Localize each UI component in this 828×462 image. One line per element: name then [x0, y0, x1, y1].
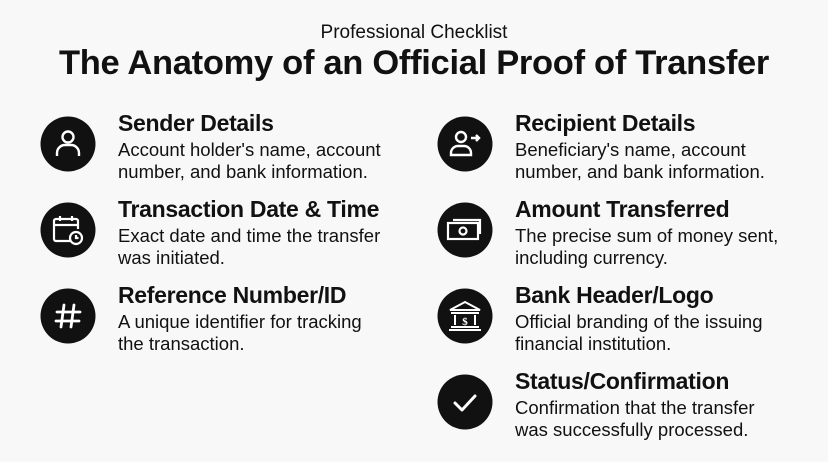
item: sender details: Account holder's name, account: [118, 139, 381, 160]
title: The Anatomy of an Official Proof of Transfer: [59, 44, 769, 82]
item: bank header: financial institution.: [515, 333, 671, 354]
item: recipient details: Recipient Details: [515, 110, 695, 136]
item: status: was successfully processed.: [515, 419, 748, 440]
item: reference number: the transaction.: [118, 333, 244, 354]
item: recipient details: [438, 110, 765, 182]
item: transaction date: Exact date and time the transfer: [118, 225, 380, 246]
item: reference number: Reference Number/ID: [118, 282, 346, 308]
item: sender details: [40, 110, 381, 182]
item: bank header: $: [462, 316, 468, 328]
item: recipient details: Beneficiary's name, account: [515, 139, 746, 160]
item: status: Status/Confirmation: [515, 368, 729, 394]
item: bank header: [438, 282, 763, 354]
item: amount transferred: [438, 196, 778, 268]
item: sender details: number, and bank information.: [118, 161, 368, 182]
item: reference number: A unique identifier for tracking: [118, 311, 362, 332]
item: transaction date: [40, 196, 380, 268]
subtitle: Professional Checklist: [321, 22, 507, 43]
item: bank header: Official branding of the issuing: [515, 311, 763, 332]
item: status: Confirmation that the transfer: [515, 397, 755, 418]
item: amount transferred: including currency.: [515, 247, 668, 268]
item: sender details: Sender Details: [118, 110, 274, 136]
item: recipient details: number, and bank information.: [515, 161, 765, 182]
item: transaction date: Transaction Date & Time: [118, 196, 379, 222]
item: amount transferred: The precise sum of money sent,: [515, 225, 778, 246]
item: reference number: [40, 282, 362, 354]
item: transaction date: was initiated.: [118, 247, 225, 268]
item: bank header: Bank Header/Logo: [515, 282, 713, 308]
item: amount transferred: Amount Transferred: [515, 196, 729, 222]
item: status: [438, 368, 755, 440]
